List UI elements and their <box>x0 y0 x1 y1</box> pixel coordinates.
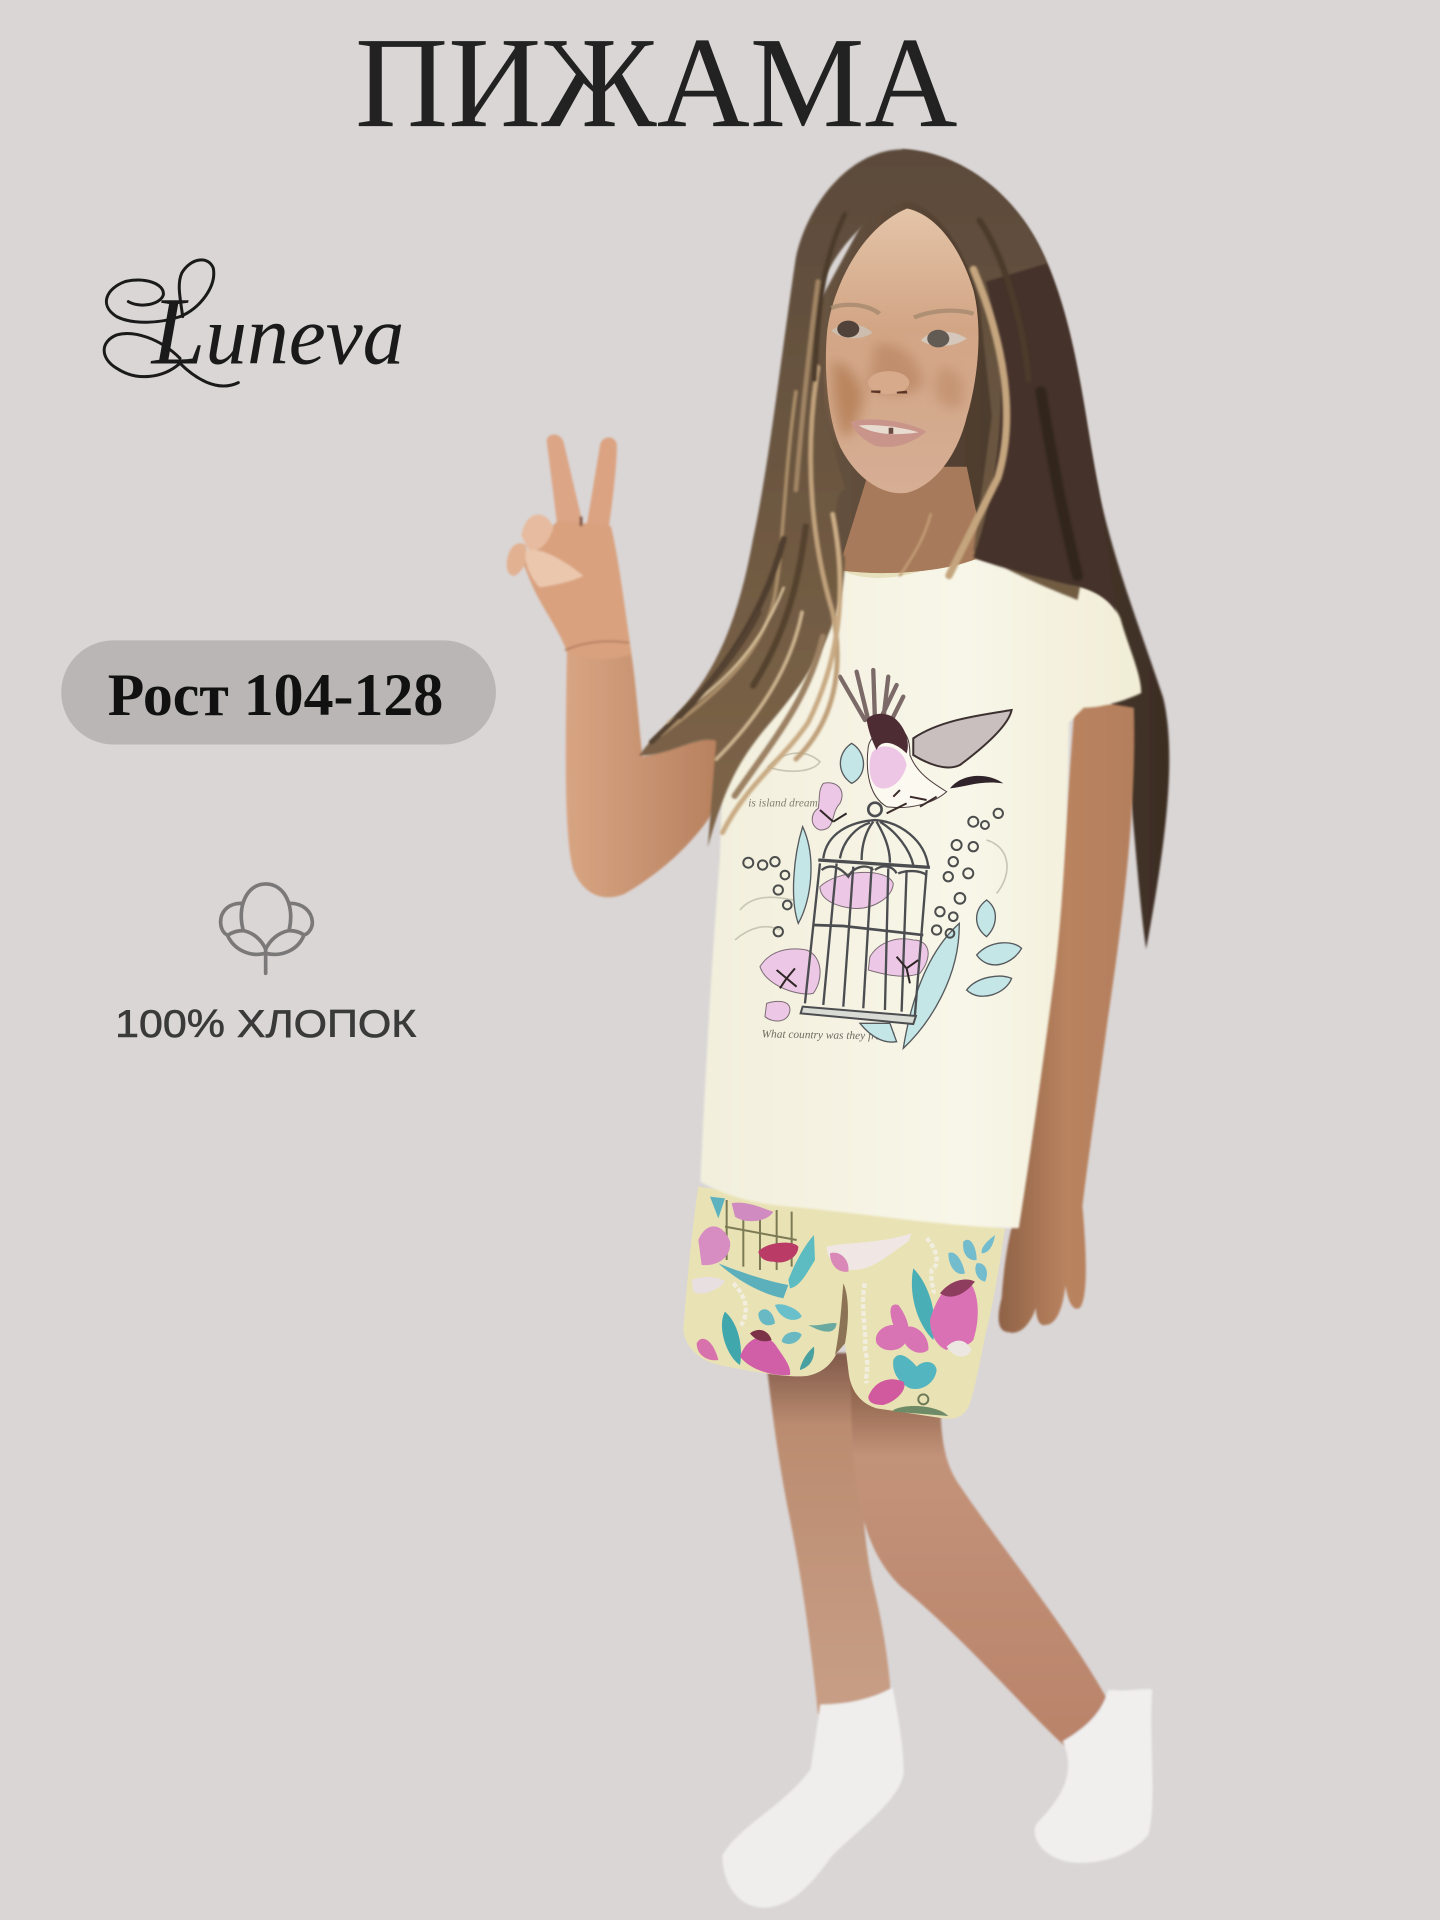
hair strands <box>651 214 1078 833</box>
legs <box>722 1353 1153 1908</box>
left sock <box>722 1687 904 1908</box>
nose shade <box>868 343 923 395</box>
bird <box>840 670 1012 813</box>
brand logo: Luneva <box>150 277 404 384</box>
blue leaves <box>794 743 1022 1048</box>
shorts print <box>692 1197 995 1416</box>
size badge <box>61 640 496 744</box>
pink flowers <box>760 783 928 1021</box>
right sock <box>1035 1689 1153 1863</box>
neck and face (drawn in local zoom coordinates) <box>826 208 985 573</box>
title: ПИЖАМА <box>355 11 958 155</box>
front leg <box>851 1384 1112 1749</box>
hand (drawn in local zoom coordinates) <box>507 434 632 659</box>
shirt print: bird and cage <box>735 670 1022 1048</box>
size badge: Рост 104-128 <box>108 662 443 728</box>
t-shirt <box>700 553 1141 1228</box>
cheek shade <box>833 360 863 440</box>
standing arm <box>999 698 1134 1333</box>
back hair <box>784 149 1169 949</box>
left iris <box>837 321 859 337</box>
highlights <box>796 367 837 759</box>
neck <box>838 467 985 573</box>
cotton badge <box>115 884 417 1046</box>
bird body <box>867 728 947 808</box>
print caption top: is island dreams is <box>748 798 833 810</box>
flower detail <box>777 810 918 988</box>
right eye <box>921 332 967 346</box>
raised arm and hand <box>507 434 730 897</box>
icon: cotton boll <box>221 884 312 973</box>
print caption bottom: What country was they from? <box>762 1028 895 1043</box>
cotton label: 100% ХЛОПОК <box>115 1003 417 1046</box>
shorts crotch shadow <box>835 1283 848 1355</box>
cage <box>801 803 930 1024</box>
brows <box>831 305 974 318</box>
back leg <box>765 1353 891 1714</box>
right iris <box>927 330 949 347</box>
nostrils <box>871 391 907 393</box>
tooth gap <box>886 428 896 434</box>
shirt collar <box>840 553 953 575</box>
face <box>826 208 979 493</box>
nose tip <box>868 371 909 394</box>
figure: girl in pajama <box>507 149 1169 1908</box>
shorts <box>683 1187 1005 1419</box>
arm <box>566 649 730 897</box>
mouth <box>851 419 926 447</box>
front hair <box>639 149 1117 847</box>
berries <box>743 809 1003 938</box>
left lock <box>639 149 1098 847</box>
right cheek shade <box>935 367 963 409</box>
faint print details <box>735 753 1007 940</box>
teeth <box>859 425 919 434</box>
right dark lock <box>973 263 1117 612</box>
left eye <box>831 324 873 338</box>
